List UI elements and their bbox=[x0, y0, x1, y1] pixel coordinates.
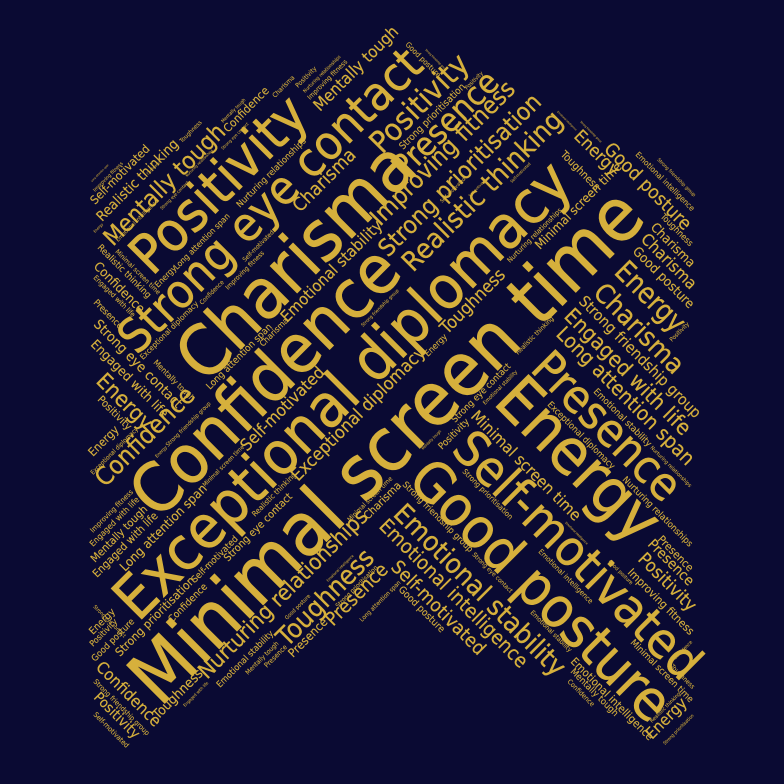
small falling words: Good posture bbox=[599, 139, 695, 235]
small rising words: Confidence bbox=[672, 639, 694, 661]
small rising words: Realistic thinking bbox=[514, 315, 556, 356]
word: Self-motivated: Self-motivated bbox=[441, 419, 713, 692]
small falling words: Strong friendship group bbox=[424, 48, 448, 72]
small falling words: Emotional intelligence bbox=[537, 548, 595, 606]
small falling words: Presence bbox=[91, 298, 125, 332]
small falling words: Nurturing relationships bbox=[649, 445, 693, 489]
small rising words: Self-motivated bbox=[190, 534, 241, 585]
small falling words: Emotional intelligence bbox=[568, 655, 656, 743]
word: Good posture: Good posture bbox=[396, 446, 685, 735]
word: Positivity upper: Positivity bbox=[362, 46, 476, 160]
small rising words: Realistic thinking bbox=[649, 691, 682, 724]
word: Energy mid: Energy bbox=[608, 255, 692, 339]
small falling words: Toughness bbox=[658, 210, 696, 248]
word: Long attention span: Long attention span bbox=[551, 322, 700, 470]
word: Self-motivated lower: Self-motivated bbox=[386, 556, 490, 660]
small rising words: Emotional intelligence bbox=[115, 198, 160, 243]
small rising words: Engaged with life bbox=[182, 680, 210, 708]
small falling words: Positivity bbox=[633, 549, 700, 616]
small rising words: Long attention span bbox=[117, 481, 210, 574]
small falling words: Good posture bbox=[607, 559, 634, 586]
small rising words: Confidence bbox=[199, 279, 226, 306]
small falling words: Confidence bbox=[566, 678, 596, 708]
small falling words: Positivity bbox=[95, 394, 134, 433]
word: Self-motivated: Self-motivated bbox=[88, 142, 153, 207]
small falling words: Charisma bbox=[648, 219, 699, 270]
small rising words: Toughness bbox=[149, 666, 207, 724]
small rising words: Charisma bbox=[258, 316, 290, 348]
word: Engaged with life: Engaged with life bbox=[559, 303, 697, 440]
small rising words: Self-motivated bbox=[509, 161, 532, 184]
small rising words: Good posture bbox=[90, 617, 137, 664]
small rising words: Confidence bbox=[89, 380, 201, 492]
word: Emotional stability: Emotional stability bbox=[387, 498, 572, 683]
small rising words: Positivity bbox=[669, 321, 691, 343]
small rising words: Improving fitness bbox=[306, 57, 350, 101]
small falling words: Good posture bbox=[404, 40, 443, 80]
small rising words: Energy bbox=[86, 423, 122, 459]
word: Strong eye contact: Strong eye contact bbox=[106, 37, 434, 364]
small rising words: Positivity bbox=[294, 65, 319, 89]
small rising words: Improving fitness bbox=[92, 161, 125, 193]
small rising words: Exceptional diplomacy bbox=[89, 426, 140, 476]
small falling words: Engaged with life bbox=[92, 274, 137, 319]
small rising words: Strong prioritisation bbox=[397, 81, 468, 152]
small rising words: Strong prioritisation bbox=[334, 564, 380, 609]
small rising words: Mentally tough bbox=[309, 22, 402, 115]
small falling words: Confidence bbox=[92, 657, 166, 731]
small falling words: Strong friendship group bbox=[579, 120, 603, 144]
small falling words: Strong friendship group bbox=[656, 157, 697, 198]
small rising words: Energy bbox=[422, 331, 449, 358]
small falling words: Realistic thinking bbox=[95, 243, 153, 301]
word: Strong prioritisation: Strong prioritisation bbox=[373, 89, 547, 262]
small rising words: Charisma bbox=[289, 145, 361, 217]
small falling words: Emotional intelligence bbox=[634, 150, 697, 213]
word: Presence: Presence bbox=[384, 63, 507, 186]
small falling words bbox=[88, 40, 701, 750]
small rising words: Exceptional diplomacy bbox=[138, 299, 201, 361]
small rising words: Positivity bbox=[464, 70, 485, 91]
small falling words: Engaged with life bbox=[88, 336, 172, 421]
small rising words: Emotional intelligence bbox=[326, 554, 355, 583]
small rising words: Improving fitness bbox=[224, 250, 266, 291]
words rising left to right bbox=[86, 22, 696, 746]
small rising words: Charisma bbox=[271, 74, 297, 99]
small falling words: Strong friendship group bbox=[92, 678, 151, 737]
small falling words: Emotional intelligence bbox=[556, 110, 578, 132]
small rising words: Charisma bbox=[361, 480, 404, 522]
small falling words: Improving fitness bbox=[625, 566, 697, 638]
small falling words: Good posture bbox=[396, 584, 447, 635]
small rising words: Confidence bbox=[146, 159, 162, 176]
small rising words: Mentally tough bbox=[220, 97, 247, 124]
small rising words: Good posture bbox=[284, 593, 312, 621]
small falling words: Mentally tough bbox=[152, 358, 197, 403]
small rising words: Self-motivated bbox=[439, 176, 467, 204]
small rising words: Mentally tough bbox=[244, 640, 281, 676]
small falling words: Positivity bbox=[90, 689, 143, 742]
word: Exceptional diplomacy: Exceptional diplomacy bbox=[100, 148, 585, 633]
word: Nurturing relationships: Nurturing relationships bbox=[193, 504, 373, 684]
small falling words: Toughness bbox=[557, 148, 602, 193]
small rising words: Nurturing relationships bbox=[235, 136, 309, 210]
small rising words: Toughness bbox=[435, 264, 509, 339]
word: Presence: Presence bbox=[521, 341, 693, 512]
small rising words: Emotional stability bbox=[482, 369, 519, 406]
word: Emotional intelligence: Emotional intelligence bbox=[374, 515, 532, 673]
small falling words: Strong eye contact bbox=[471, 551, 514, 595]
small rising words: Realistic thinking bbox=[250, 470, 298, 518]
small rising words: Self-motivated bbox=[236, 362, 329, 455]
small falling words: Strong prioritisation bbox=[461, 467, 515, 521]
word: Charisma: Charisma bbox=[587, 277, 691, 381]
small falling words: Toughness bbox=[668, 663, 696, 691]
word: Minimal screen time: Minimal screen time bbox=[111, 172, 660, 721]
small rising words: Energy bbox=[642, 694, 691, 743]
word: Realistic thinking: Realistic thinking bbox=[94, 137, 182, 225]
small falling words: Emotional intelligence bbox=[564, 521, 589, 546]
small falling words: Charisma bbox=[637, 229, 701, 293]
small falling words: Strong eye contact bbox=[92, 604, 127, 639]
small rising words: Nurturing relationships bbox=[185, 148, 214, 178]
small rising words: Energy bbox=[153, 264, 179, 289]
small rising words: Self-motivated bbox=[468, 178, 487, 198]
small rising words: Confidence bbox=[166, 581, 210, 625]
word: Strong friendship group: Strong friendship group bbox=[575, 292, 704, 422]
small falling words: Mentally tough bbox=[568, 667, 620, 719]
word: Toughness: Toughness bbox=[269, 542, 380, 653]
small rising words: Mentally tough bbox=[88, 503, 150, 565]
small rising words: Engaged with life bbox=[88, 495, 141, 548]
small rising words: Strong eye contact bbox=[159, 180, 190, 211]
small falling words: Exceptional diplomacy bbox=[546, 399, 617, 471]
small rising words: Nurturing relationships bbox=[506, 206, 564, 264]
small falling words: Emotional stability bbox=[591, 387, 653, 449]
small falling words: Self-motivated bbox=[92, 711, 131, 750]
word: Improving fitness: Improving fitness bbox=[365, 75, 521, 231]
small falling words: Minimal screen time bbox=[628, 638, 695, 705]
word: Presence lower: Presence bbox=[321, 559, 393, 631]
small falling words: Energy bbox=[570, 125, 624, 180]
small rising words: Energy bbox=[87, 606, 118, 637]
small rising words: Mentally tough bbox=[421, 429, 442, 451]
small rising words: Minimal screen time bbox=[532, 160, 625, 252]
small rising words: Strong prioritisation bbox=[113, 574, 198, 659]
small rising words: Long attention span bbox=[204, 321, 275, 392]
small rising words: Long attention span bbox=[359, 580, 403, 623]
small rising words: Presence bbox=[263, 643, 289, 669]
small rising words: Presence bbox=[285, 615, 330, 660]
small falling words: Strong eye contact bbox=[90, 317, 185, 412]
small falling words: Strong friendship group bbox=[401, 479, 475, 554]
small rising words: Strong prioritisation bbox=[662, 713, 696, 746]
small falling words: Nurturing relationships bbox=[620, 475, 695, 550]
small rising words: Toughness bbox=[178, 120, 204, 145]
small rising words bbox=[86, 22, 696, 746]
small falling words: Minimal screen time bbox=[114, 248, 162, 296]
small rising words: Minimal screen time bbox=[202, 444, 246, 488]
small rising words: Self-motivated bbox=[241, 229, 276, 263]
word: Energy: Energy bbox=[481, 363, 676, 557]
small rising words: Strong eye contact bbox=[220, 121, 250, 151]
small rising words: Energy bbox=[154, 444, 169, 459]
word: Positivity: Positivity bbox=[117, 82, 321, 287]
small falling words: Presence bbox=[644, 536, 697, 589]
words falling left to right bbox=[88, 40, 713, 750]
small rising words: Strong friendship group bbox=[165, 401, 213, 448]
small falling words: Energy bbox=[91, 368, 158, 435]
small rising words: Nurturing relationships bbox=[302, 54, 343, 94]
small falling words: Presence bbox=[655, 533, 696, 574]
small rising words: Long attention span bbox=[90, 163, 110, 183]
small rising words: Positivity bbox=[437, 417, 472, 452]
word: Mentally tough: Mentally tough bbox=[98, 118, 231, 251]
small rising words: Strong eye contact bbox=[222, 491, 295, 564]
small falling words: Confidence bbox=[91, 259, 148, 316]
small rising words: Strong eye contact bbox=[450, 361, 514, 425]
small rising words: Minimal screen time bbox=[346, 475, 394, 523]
small rising words: Confidence bbox=[221, 84, 272, 135]
small rising words: Improving fitness bbox=[89, 488, 135, 534]
small rising words: Emotional stability bbox=[215, 629, 276, 690]
word: Confidence: Confidence bbox=[115, 231, 416, 533]
small rising words: Positivity bbox=[87, 616, 119, 648]
word: Realistic thinking large: Realistic thinking bbox=[396, 105, 569, 278]
small rising words: Strong friendship group bbox=[360, 288, 401, 328]
word: Emotional stability: Emotional stability bbox=[277, 216, 386, 326]
small falling words: Emotional stability bbox=[529, 609, 573, 654]
small rising words: Engaged with life bbox=[90, 510, 161, 580]
small rising words: Exceptional diplomacy bbox=[286, 342, 429, 485]
small rising words: Energy bbox=[93, 222, 104, 234]
small rising words: Long attention span bbox=[172, 212, 232, 271]
small falling words: Good posture bbox=[630, 243, 698, 311]
word: Charisma: Charisma bbox=[159, 125, 431, 397]
word: Minimal screen time: Minimal screen time bbox=[467, 407, 585, 525]
